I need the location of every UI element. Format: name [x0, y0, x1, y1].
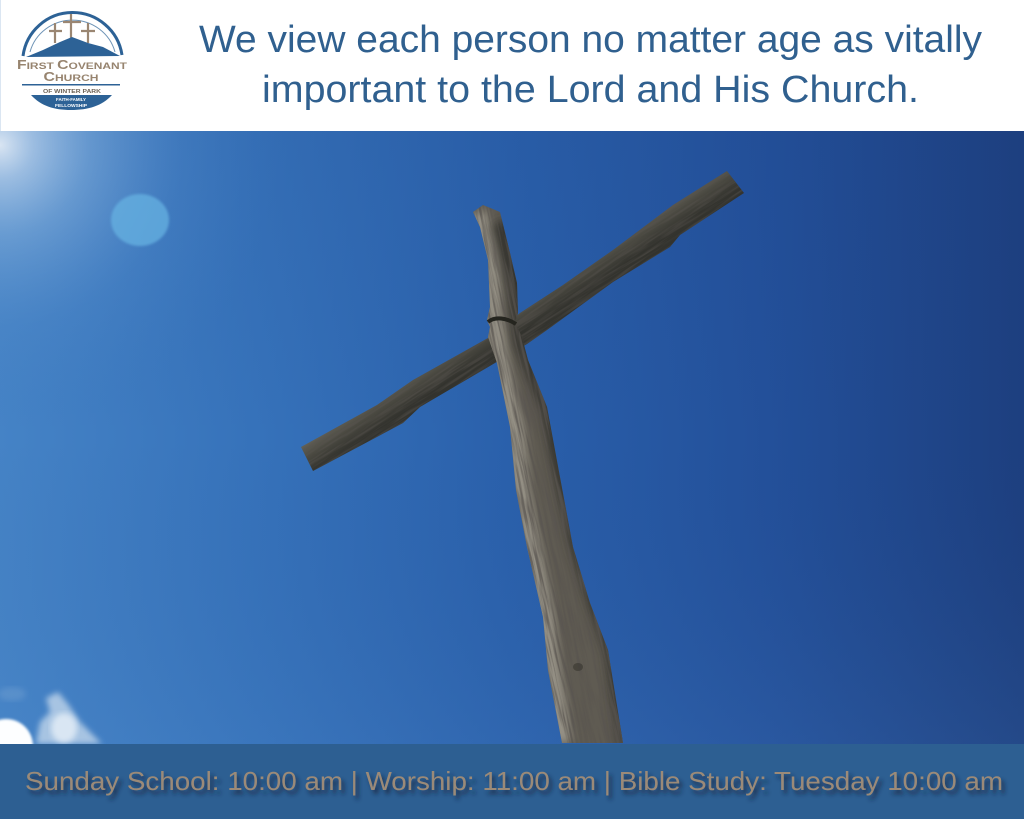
panel: header band: [0, 0, 1024, 131]
logo name: FIRST COVENANT: [17, 58, 127, 72]
heading: We view each person no matter age as vitally: [199, 19, 982, 61]
logo mountain: [26, 37, 120, 57]
heading: important to the Lord and His Church.: [262, 69, 919, 111]
logo: C HURCH: [44, 70, 99, 84]
heading: [199, 19, 982, 111]
icon: wooden cross: [301, 171, 744, 743]
logo: FAITH-FAMILY: [56, 97, 86, 102]
service times text: Sunday School: 10:00 am | Worship: 11:00 am | Bible Study: Tuesday 10:00 am: [25, 766, 1003, 796]
icon: lens flare: [111, 194, 169, 246]
logo: FELLOWSHIP: [55, 103, 87, 108]
logo crosses: [49, 14, 95, 43]
panel: service times band: [0, 744, 1024, 819]
panel: sky photograph: [0, 131, 1024, 773]
clouds: [0, 686, 103, 744]
logo: [17, 13, 127, 110]
logo tagline: OF WINTER PARK: [43, 89, 101, 95]
upright post: [473, 205, 623, 743]
logo arcs: [23, 13, 122, 56]
logo bowl: [31, 95, 112, 110]
cross beam: [301, 171, 744, 471]
